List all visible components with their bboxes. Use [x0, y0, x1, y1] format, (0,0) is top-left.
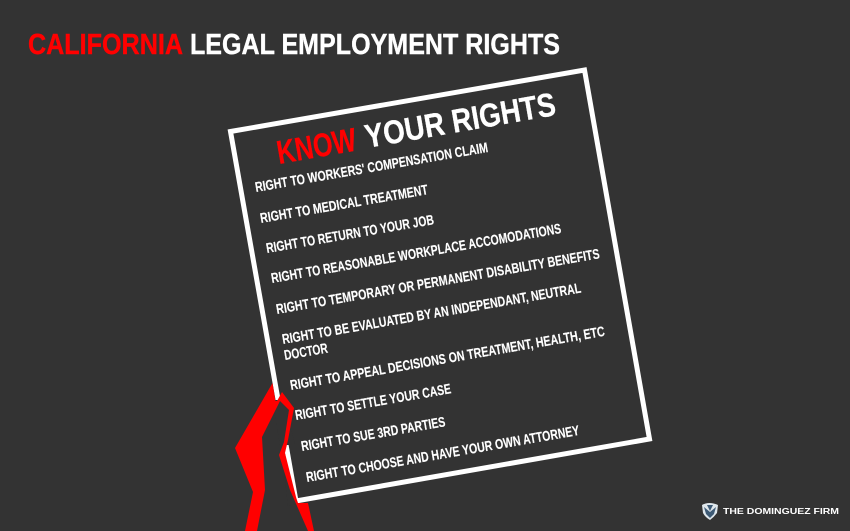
sign border: [230, 70, 650, 506]
icon: shield: [702, 503, 718, 520]
logo wordmark: THE DOMINGUEZ FIRM: [723, 507, 839, 516]
list of rights: [254, 139, 606, 485]
list of rights: RIGHT TO BE EVALUATED BY AN INDEPENDANT, NEUTRAL: [281, 280, 582, 347]
list of rights: DOCTOR: [283, 340, 329, 363]
title: LEGAL EMPLOYMENT RIGHTS: [190, 29, 560, 61]
sign heading: KNOW: [274, 121, 360, 171]
list of rights: RIGHT TO CHOOSE AND HAVE YOUR OWN ATTORNEY: [305, 422, 581, 485]
sign heading: YOUR RIGHTS: [362, 85, 558, 155]
list of rights: RIGHT TO SUE 3RD PARTIES: [300, 413, 446, 454]
list of rights: RIGHT TO REASONABLE WORKPLACE ACCOMODATIONS: [270, 220, 562, 286]
list of rights: RIGHT TO SETTLE YOUR CASE: [294, 380, 452, 423]
title: CALIFORNIA: [28, 29, 183, 61]
list of rights: RIGHT TO MEDICAL TREATMENT: [259, 181, 429, 226]
list of rights: RIGHT TO TEMPORARY OR PERMANENT DISABILITY BENEFITS: [275, 245, 601, 317]
icon: red legs holding the sign: [235, 383, 314, 531]
logo: The Dominguez Firm: [702, 503, 839, 520]
list of rights: RIGHT TO RETURN TO YOUR JOB: [265, 211, 435, 256]
list of rights: RIGHT TO WORKERS' COMPENSATION CLAIM: [254, 139, 489, 195]
title: [28, 29, 560, 61]
sign heading: [274, 85, 558, 171]
list of rights: RIGHT TO APPEAL DECISIONS ON TREATMENT, HEALTH, ETC: [289, 323, 606, 393]
